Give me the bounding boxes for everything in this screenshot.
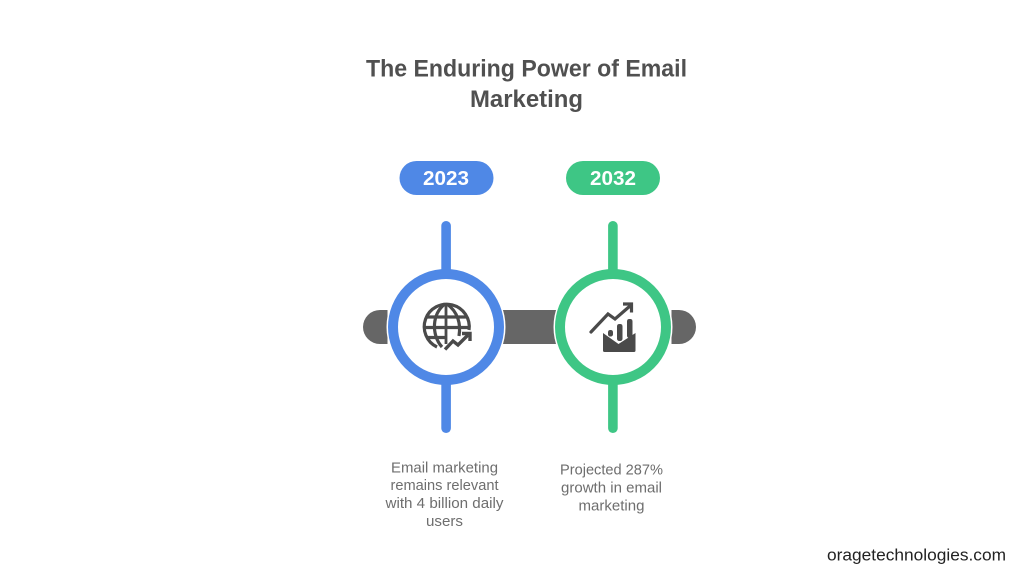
title: The Enduring Power of Email <box>366 56 687 82</box>
pill: 2032: 2032 <box>590 168 636 190</box>
text: 2023 description: with 4 billion daily <box>384 496 504 512</box>
icon: globe with trend arrow <box>424 304 470 350</box>
title: Marketing <box>470 86 583 113</box>
ring: 2032 <box>560 274 666 380</box>
ring: 2023 <box>393 274 499 380</box>
text: 2032 description <box>560 462 663 514</box>
text: 2032 description: growth in email <box>561 480 662 496</box>
text: 2023 description: users <box>426 514 463 530</box>
text: 2023 description: remains relevant <box>390 478 498 494</box>
pill: 2032 <box>566 161 660 195</box>
watermark: oragetechnologies.com <box>827 546 1006 564</box>
icon: chart growth with envelope <box>591 304 636 352</box>
vertical line: 2032 <box>608 221 618 433</box>
text: 2032 description: marketing <box>578 498 644 514</box>
title <box>366 56 687 113</box>
ring halo <box>386 268 672 386</box>
text: 2023 description: Email marketing <box>391 460 498 476</box>
pill: 2023 <box>400 161 494 195</box>
pill: 2023: 2023 <box>423 168 469 190</box>
text: 2023 description <box>384 460 504 530</box>
vertical line: 2023 <box>441 221 451 433</box>
timeline bar <box>363 310 696 344</box>
text: 2032 description: Projected 287% <box>560 462 663 478</box>
